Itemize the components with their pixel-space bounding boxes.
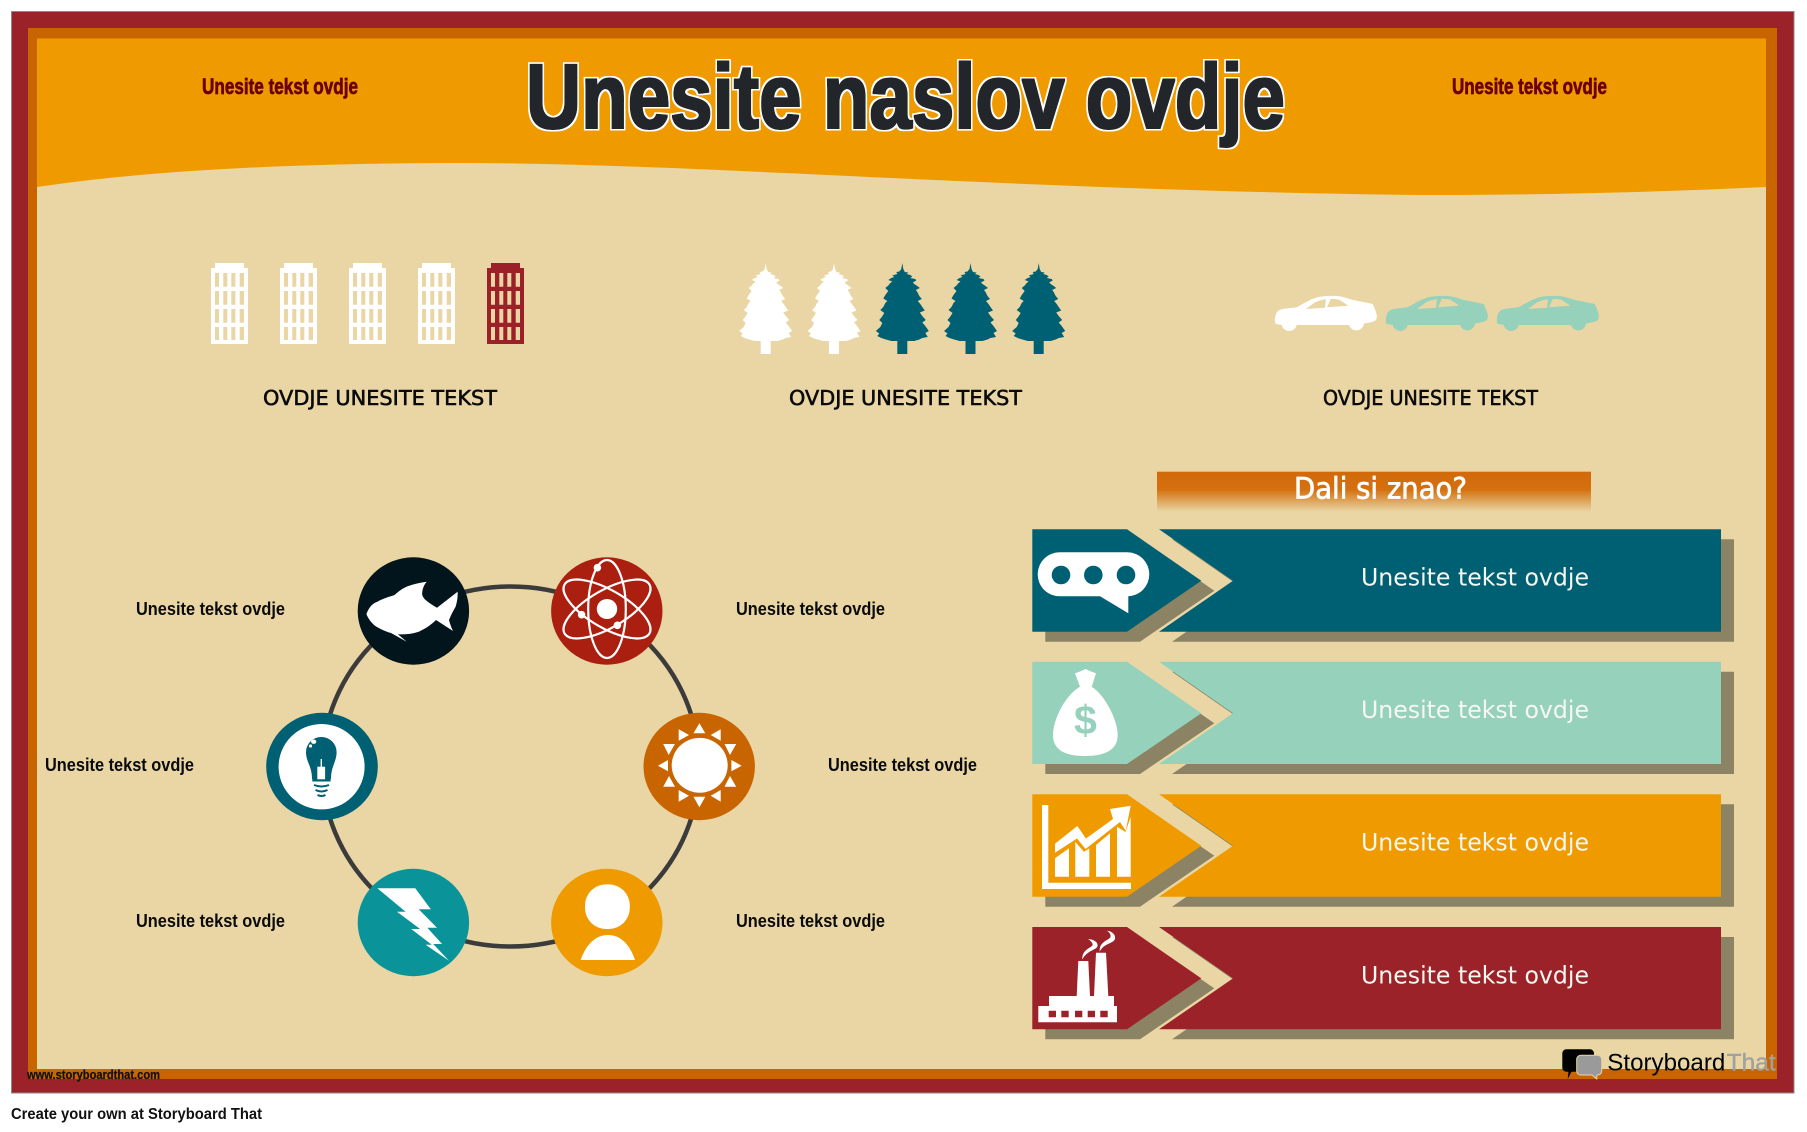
arrow row 3: growth chart: [1032, 794, 1734, 907]
icon: money bag: $: [1074, 697, 1097, 743]
icon: money bag: [1053, 669, 1118, 756]
banner: did you know: Dali si znao?: [1294, 472, 1467, 506]
pictogram: trees: [739, 263, 1065, 354]
caption: buildings: OVDJE UNESITE TEKST: [263, 386, 498, 410]
ring label: bolt: Unesite tekst ovdje: [136, 910, 285, 931]
arrow row 4: factory: [1032, 927, 1734, 1039]
title: Unesite naslov ovdje: [526, 46, 1285, 148]
icon: person: [551, 869, 662, 976]
banner: did you know: [1157, 472, 1591, 512]
ring label: atom: Unesite tekst ovdje: [736, 598, 885, 619]
header text right: Unesite tekst ovdje: [1452, 74, 1607, 99]
row 4 text: Unesite tekst ovdje: [1361, 961, 1589, 989]
footer credit: Create your own at Storyboard That: [11, 1106, 262, 1123]
row 1 text: Unesite tekst ovdje: [1361, 564, 1589, 592]
icon: sun: [644, 713, 755, 820]
ring label: bulb: Unesite tekst ovdje: [45, 754, 194, 775]
row 3 text: Unesite tekst ovdje: [1361, 829, 1589, 857]
ring label: sun: Unesite tekst ovdje: [828, 754, 977, 775]
row 2 text: Unesite tekst ovdje: [1361, 696, 1589, 724]
ring label: shark: Unesite tekst ovdje: [136, 598, 285, 619]
logo: Storyboard That: That: [1727, 1050, 1776, 1077]
arrow row 1: chat: [1032, 529, 1734, 642]
icon: atom: [551, 557, 662, 665]
logo: Storyboard That: Storyboard: [1607, 1050, 1725, 1077]
ring connecting icons: [322, 586, 699, 946]
icon: factory: [1038, 931, 1117, 1022]
pictogram: cars: [1275, 296, 1599, 331]
icon: lightning bolt: [358, 869, 469, 976]
pictogram: buildings: [211, 263, 524, 344]
wavy header band: [37, 38, 1766, 195]
caption: cars: OVDJE UNESITE TEKST: [1323, 386, 1539, 410]
header text left: Unesite tekst ovdje: [202, 74, 358, 99]
icon: shark: [358, 557, 469, 665]
ring label: person: Unesite tekst ovdje: [736, 910, 885, 931]
arrow row 2: money: [1032, 662, 1734, 774]
caption: trees: OVDJE UNESITE TEKST: [789, 386, 1023, 410]
icon: light bulb: [266, 713, 378, 820]
icon: speech bubble: [1038, 552, 1149, 613]
logo: Storyboard That: [1562, 1049, 1776, 1079]
icon: growth chart: [1042, 805, 1131, 889]
watermark url: www.storyboardthat.com: [26, 1067, 160, 1082]
